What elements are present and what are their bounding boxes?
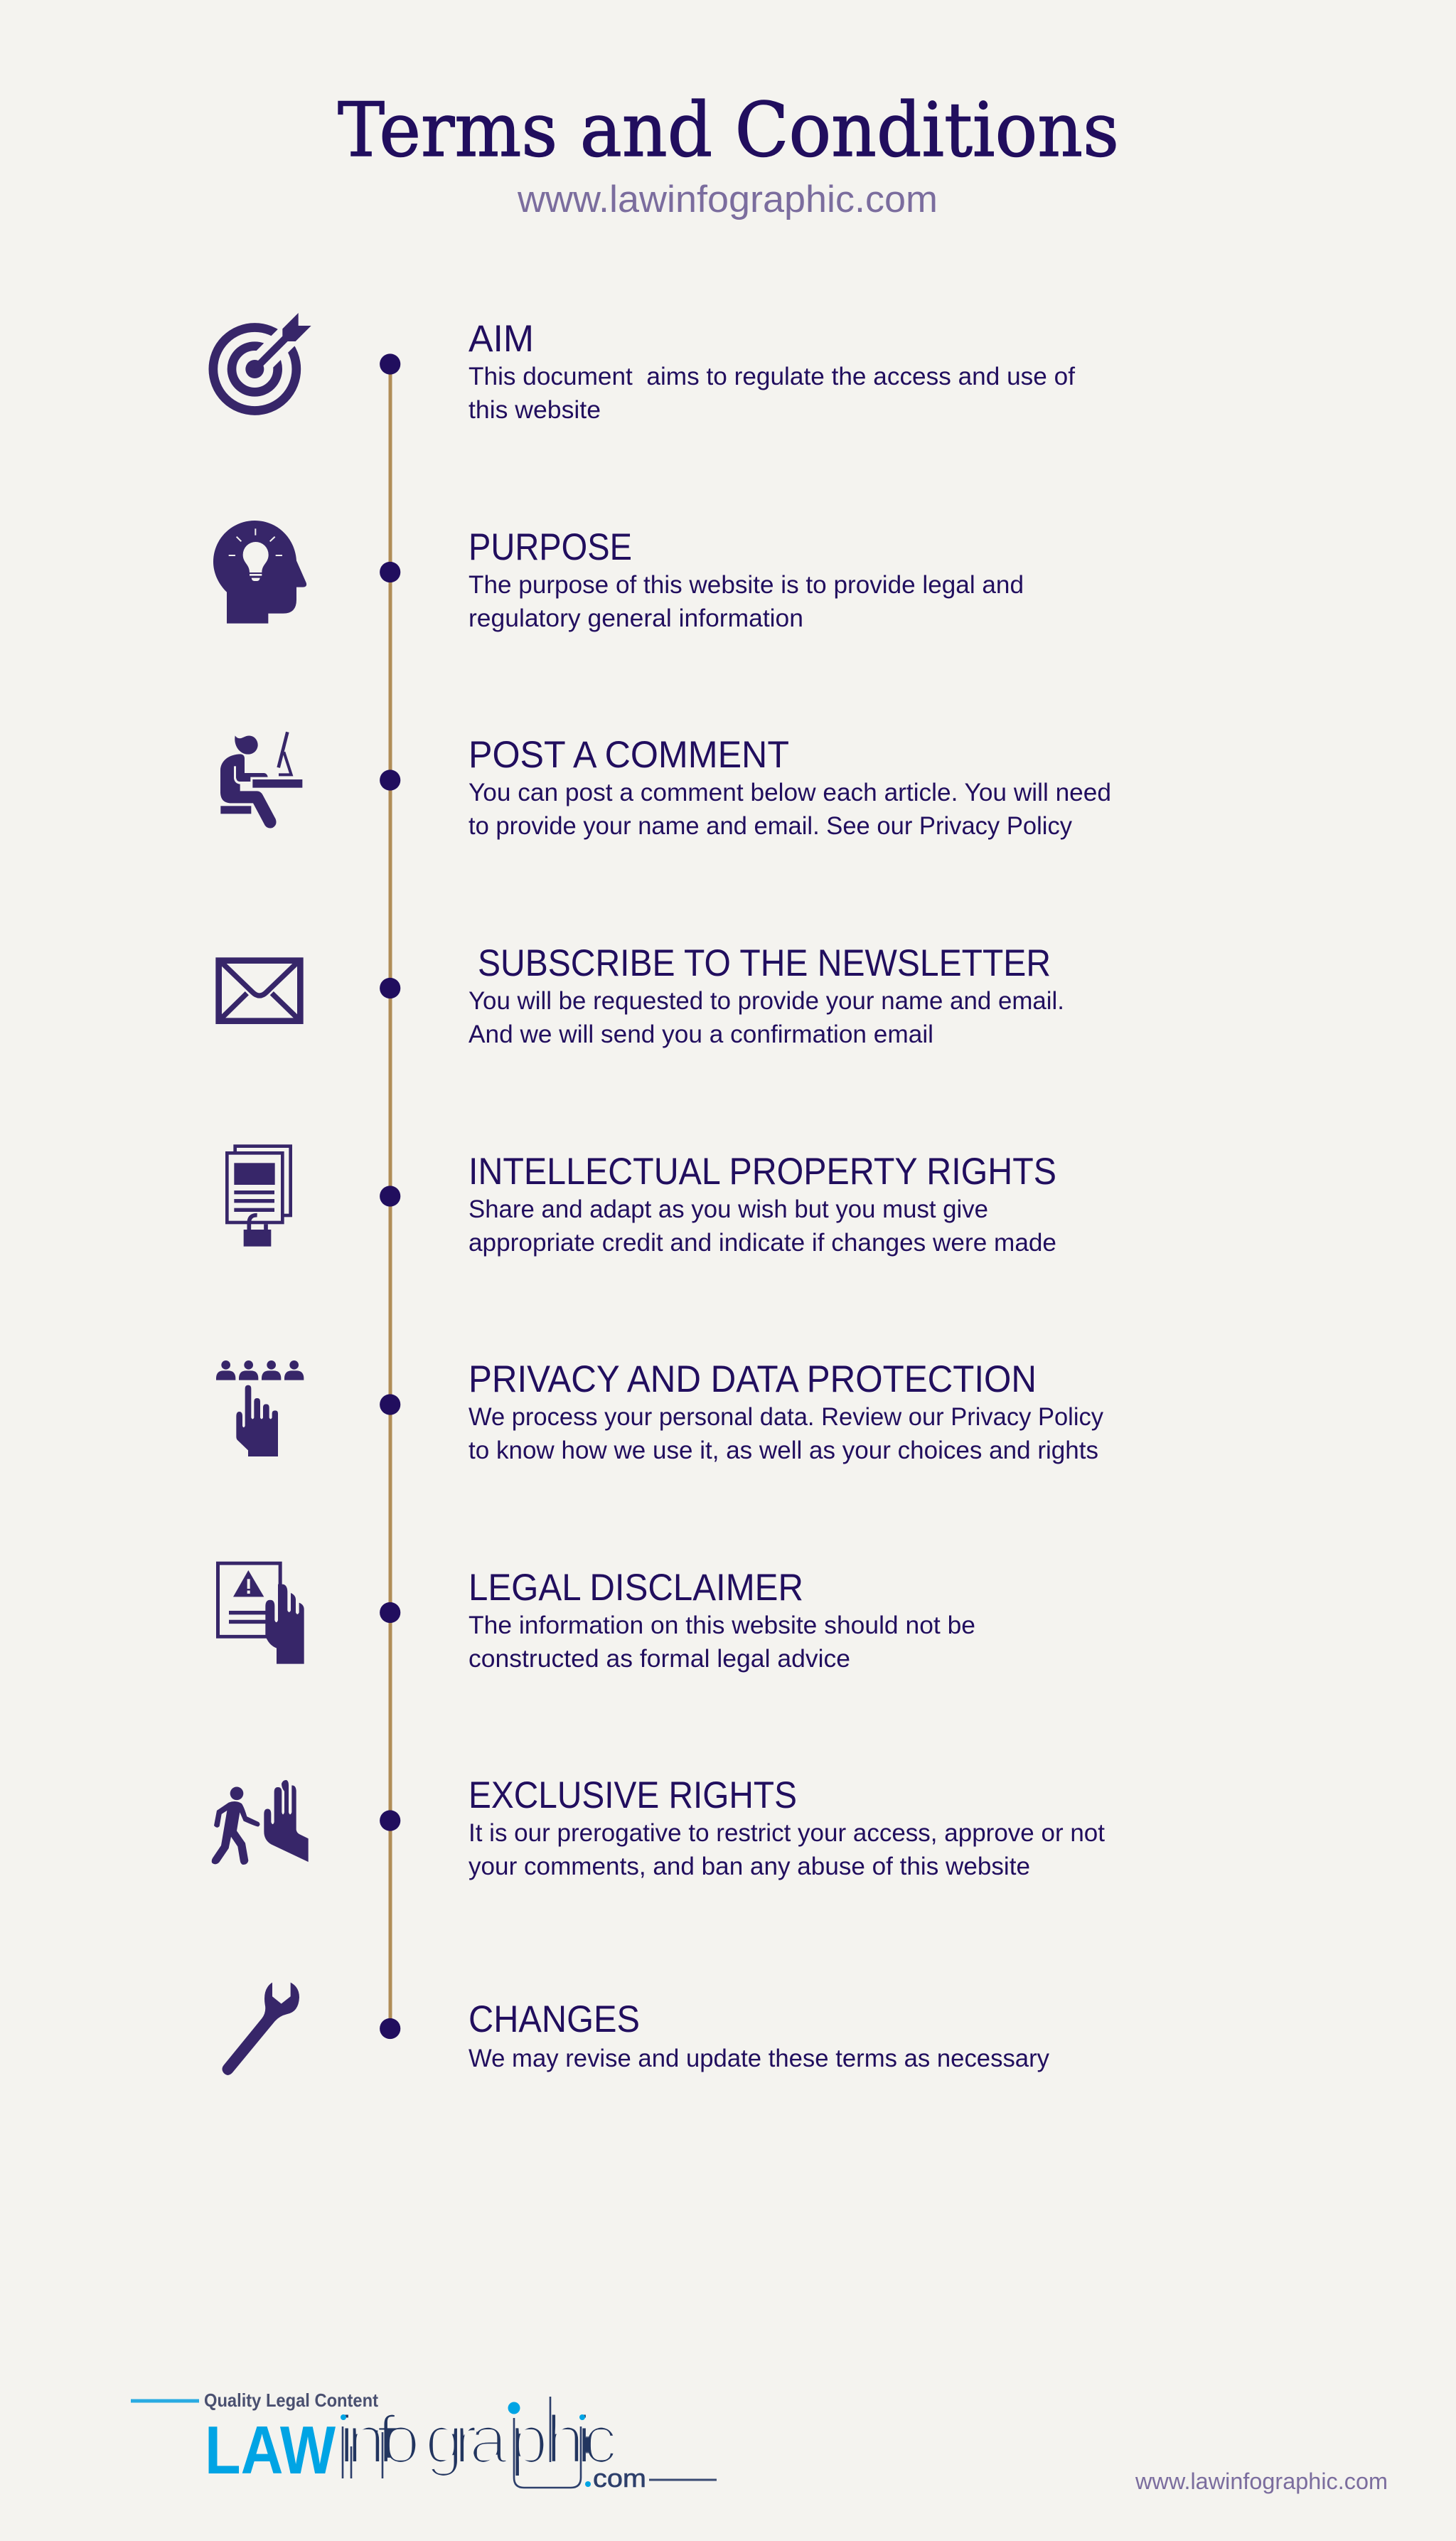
icon: hand pointing at people	[216, 1360, 304, 1456]
logo: law infographic	[131, 2390, 717, 2493]
body text: The purpose of this website is to provide legal and	[469, 571, 1024, 599]
timeline dot	[380, 353, 400, 375]
logo .com: com	[593, 2463, 646, 2493]
icon: person at computer	[220, 732, 302, 829]
timeline dot	[380, 1602, 400, 1623]
body text	[469, 571, 1024, 632]
row: intellectual property rights	[227, 1146, 1056, 1257]
logo extended strokes	[343, 2397, 581, 2488]
timeline dot	[380, 2018, 400, 2039]
heading: POST A COMMENT	[469, 734, 789, 776]
body text: You will be requested to provide your name and email.	[469, 987, 1064, 1015]
heading: AIM	[469, 318, 534, 360]
row: post a comment	[220, 732, 1111, 840]
logo dots	[341, 2402, 591, 2487]
body text: You can post a comment below each article. You will need	[469, 779, 1111, 806]
body text	[469, 363, 1075, 424]
timeline dot	[380, 769, 400, 791]
row: aim	[213, 313, 1075, 424]
heading: PURPOSE	[469, 526, 632, 568]
body text	[469, 779, 1111, 840]
icon: target with arrow	[213, 313, 311, 410]
body text: regulatory general information	[469, 604, 803, 632]
icon: documents with padlock	[227, 1146, 291, 1247]
icon: warning notice and hand	[216, 1562, 304, 1664]
body text: to provide your name and email. See our Privacy Policy	[469, 812, 1072, 840]
heading: LEGAL DISCLAIMER	[469, 1567, 803, 1609]
body text: The information on this website should not be	[469, 1612, 975, 1639]
tagline: Quality Legal Content	[204, 2390, 378, 2411]
footer url: www.lawinfographic.com	[1135, 2468, 1388, 2494]
heading: CHANGES	[469, 1998, 640, 2040]
logo trailing line	[649, 2479, 717, 2481]
subtitle url: www.lawinfographic.com	[517, 179, 938, 220]
timeline dot	[380, 1186, 400, 1207]
heading: PRIVACY AND DATA PROTECTION	[469, 1358, 1037, 1400]
body text	[469, 1195, 1056, 1257]
body text: appropriate credit and indicate if changes were made	[469, 1229, 1056, 1257]
logo word infographic: infographic	[339, 2402, 617, 2478]
row: privacy and data protection	[216, 1358, 1103, 1464]
body text: This document aims to regulate the access and use of	[469, 363, 1075, 390]
row: exclusive rights	[212, 1774, 1105, 1880]
body text: We may revise and update these terms as necessary	[469, 2045, 1049, 2072]
icon: wrench	[222, 1983, 299, 2075]
row: purpose	[213, 521, 1024, 632]
body text: this website	[469, 396, 601, 424]
body text: It is our prerogative to restrict your access, approve or not	[469, 1819, 1105, 1847]
logo word LAW: LAW	[205, 2412, 336, 2488]
body text	[469, 987, 1064, 1048]
icon: walking person and stop hand	[212, 1780, 309, 1865]
row: legal disclaimer	[216, 1562, 975, 1673]
heading: INTELLECTUAL PROPERTY RIGHTS	[469, 1151, 1056, 1193]
row: changes	[222, 1983, 1049, 2075]
body text: Share and adapt as you wish but you must give	[469, 1195, 988, 1223]
body text	[469, 1403, 1103, 1464]
body text: your comments, and ban any abuse of this website	[469, 1853, 1030, 1880]
body text	[469, 1819, 1105, 1880]
heading: SUBSCRIBE TO THE NEWSLETTER	[478, 942, 1051, 984]
icon: head with light bulb	[213, 521, 306, 624]
heading: EXCLUSIVE RIGHTS	[469, 1774, 797, 1816]
body text: constructed as formal legal advice	[469, 1645, 850, 1673]
title: Terms and Conditions	[338, 87, 1119, 174]
icon: envelope	[219, 961, 300, 1021]
row: subscribe to the newsletter	[219, 942, 1064, 1048]
timeline line	[388, 364, 392, 2028]
body text	[469, 1612, 975, 1673]
tagline line	[131, 2399, 199, 2402]
body text: to know how we use it, as well as your choices and rights	[469, 1437, 1098, 1464]
body text: And we will send you a confirmation email	[469, 1021, 933, 1048]
timeline dot	[380, 978, 400, 998]
timeline dot	[380, 562, 400, 582]
timeline dot	[380, 1394, 400, 1415]
timeline dot	[380, 1810, 400, 1831]
body text: We process your personal data. Review our Privacy Policy	[469, 1403, 1103, 1431]
